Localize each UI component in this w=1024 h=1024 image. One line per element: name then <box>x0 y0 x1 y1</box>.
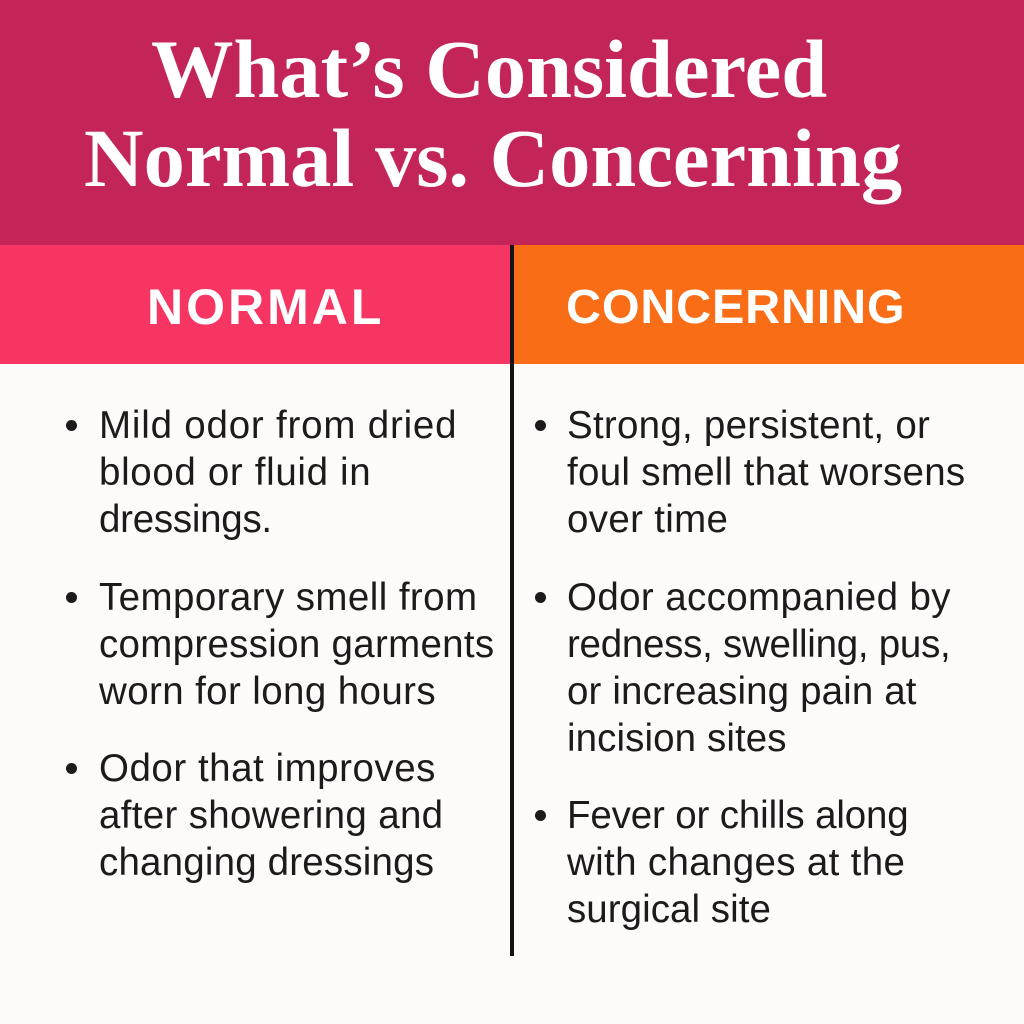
title banner <box>0 0 1024 245</box>
bullet 3: Fever or chills along <box>567 794 909 837</box>
bullet 1 <box>66 404 457 541</box>
bullet 2 <box>535 576 951 760</box>
panel: concerning list <box>535 404 965 931</box>
bullet 2: compression garments <box>99 623 494 666</box>
bullet 3 <box>535 794 909 931</box>
bullet 1: dressings. <box>99 498 272 541</box>
bullet 1 <box>535 404 965 541</box>
bullet 2: Odor accompanied by <box>567 576 951 619</box>
column divider <box>510 245 514 956</box>
bullet 1: foul smell that worsens <box>567 451 965 494</box>
bullet 2: incision sites <box>567 717 787 760</box>
panel: normal list <box>66 404 494 884</box>
bullet 2 <box>66 576 494 713</box>
title line 1: What’s Considered <box>151 23 827 115</box>
bullet 3 <box>66 747 443 884</box>
bullet 2: redness, swelling, pus, <box>567 623 950 666</box>
bullet 1: over time <box>567 498 728 541</box>
bullet 1: Mild odor from dried <box>99 404 457 447</box>
bullet 3: changing dressings <box>99 841 434 884</box>
bullet 2: worn for long hours <box>99 670 436 713</box>
bullet 3: surgical site <box>567 888 771 931</box>
bullet 2: Temporary smell from <box>99 576 478 619</box>
bullet 3: with changes at the <box>567 841 905 884</box>
concerning label: CONCERNING <box>566 280 905 334</box>
bullet 1: Strong, persistent, or <box>567 404 930 447</box>
header: normal <box>0 245 510 364</box>
bullet 3: after showering and <box>99 794 443 837</box>
title line 2: Normal vs. Concerning <box>84 112 902 204</box>
header: concerning <box>514 245 1024 364</box>
bullet 2: or increasing pain at <box>567 670 917 713</box>
bullet 3: Odor that improves <box>99 747 436 790</box>
normal label: NORMAL <box>147 279 384 335</box>
bullet 1: blood or fluid in <box>99 451 371 494</box>
